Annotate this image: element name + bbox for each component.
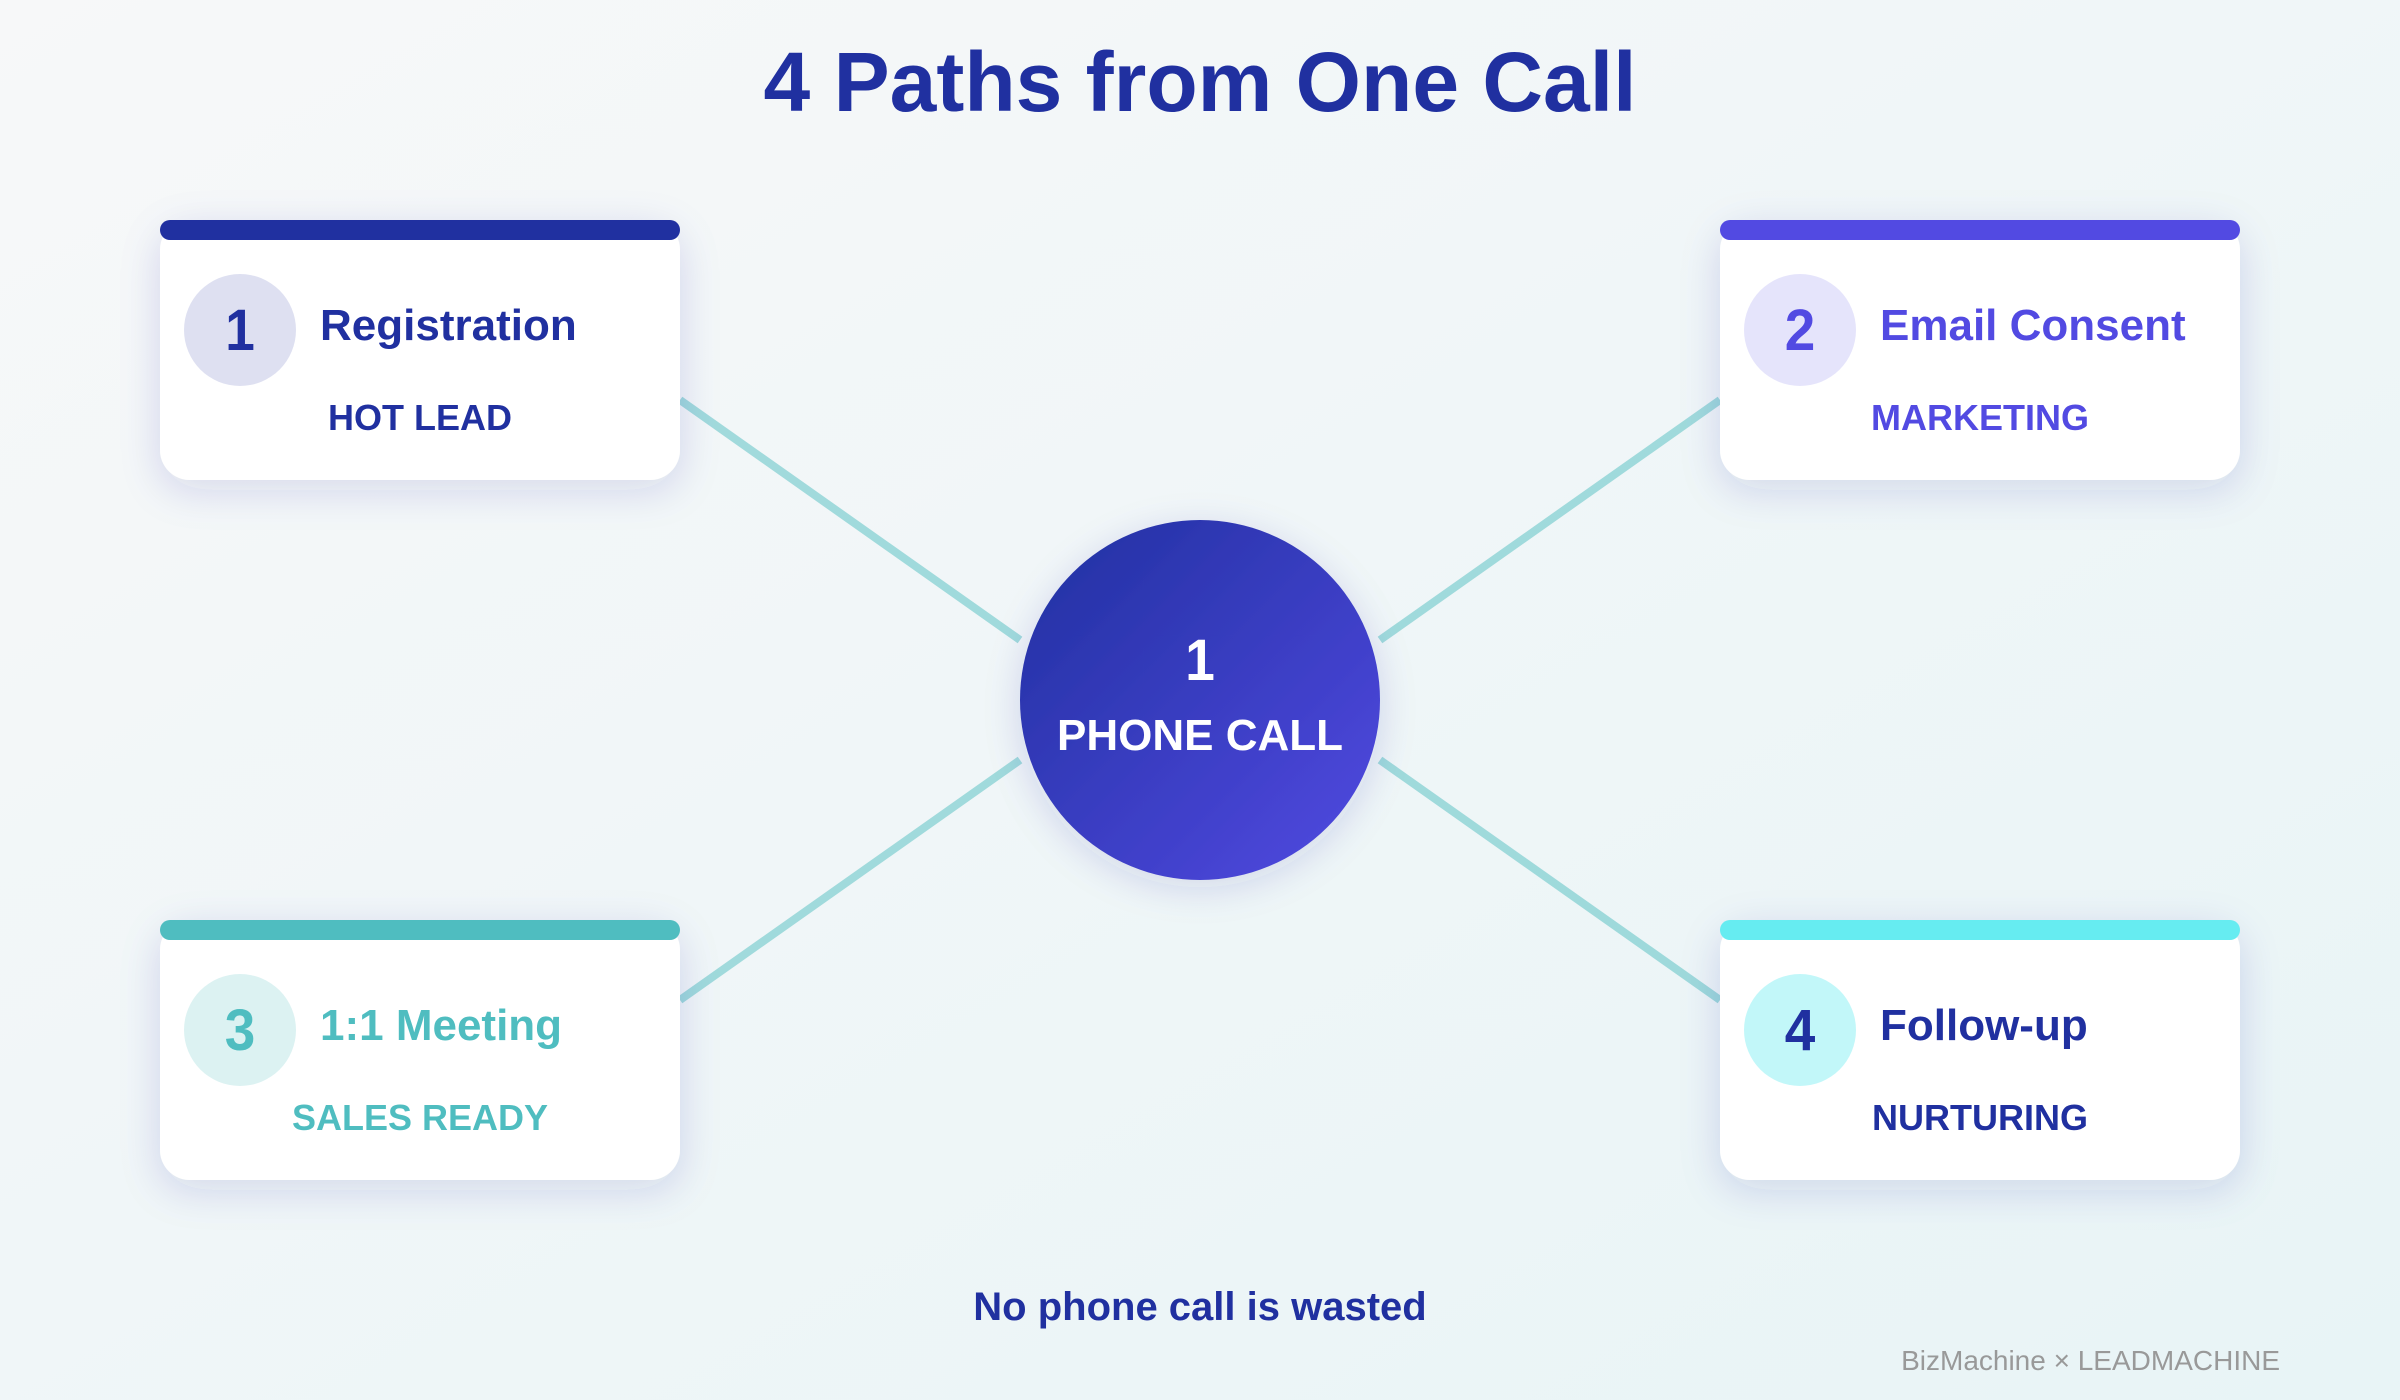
connector lines [680, 400, 1720, 1000]
card 2: email consent: MARKETING [1871, 397, 2089, 438]
card 4: follow-up: 4 [1785, 998, 1816, 1062]
card 4: follow-up [1720, 920, 2240, 1180]
central hub: 1 phone call: 1 [1185, 628, 1215, 693]
card 3: 1:1 meeting: 1:1 Meeting [320, 1001, 562, 1050]
central hub: 1 phone call: PHONE CALL [1057, 711, 1343, 760]
bottom tagline: No phone call is wasted [973, 1285, 1427, 1329]
card 4: follow-up: NURTURING [1872, 1097, 2088, 1138]
title: 4 Paths from One Call [764, 35, 1636, 129]
card 1: registration [160, 220, 680, 480]
card 4: follow-up: Follow-up [1880, 1001, 2088, 1050]
card 3: 1:1 meeting [160, 920, 680, 1180]
card 1: registration: HOT LEAD [328, 397, 512, 438]
card 2: email consent: 2 [1785, 298, 1815, 362]
card 1: registration: Registration [320, 301, 577, 350]
footer credit: BizMachine × LEADMACHINE [1901, 1345, 2280, 1376]
card 2: email consent [1720, 220, 2240, 480]
card 3: 1:1 meeting: SALES READY [292, 1097, 548, 1138]
card 3: 1:1 meeting: 3 [225, 998, 255, 1062]
card 1: registration: 1 [225, 298, 255, 363]
card 2: email consent: Email Consent [1880, 301, 2186, 350]
central hub: 1 phone call [1020, 520, 1380, 880]
